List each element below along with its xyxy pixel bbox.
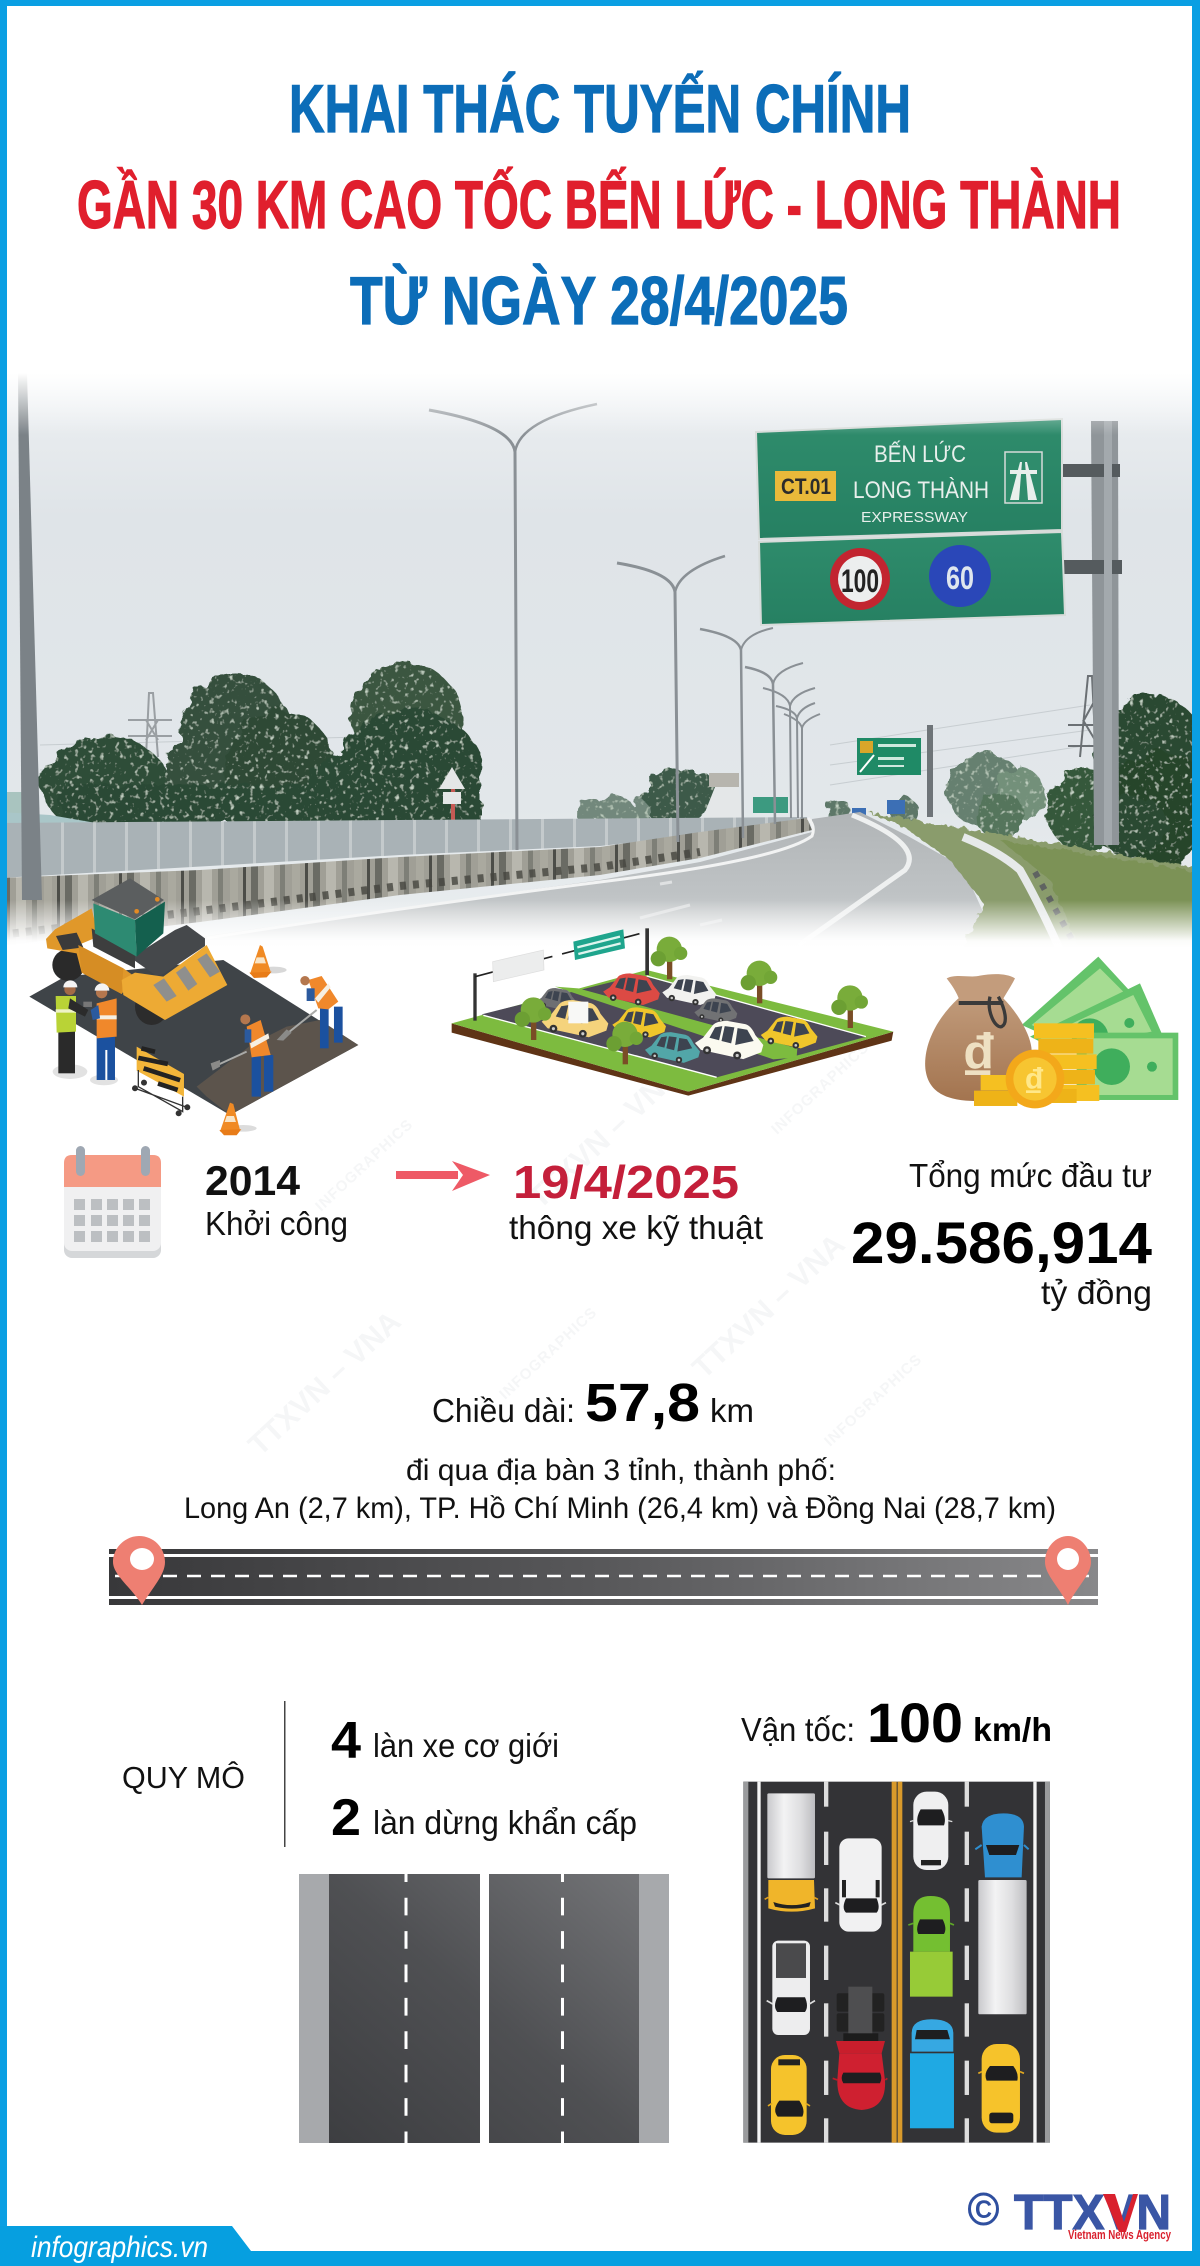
guard rail: [963, 837, 1060, 950]
lane counts: 2: [331, 1789, 361, 1847]
cone upper: [249, 945, 287, 978]
footer band: [0, 2226, 1200, 2266]
illustration: money bag, coins and notes: [925, 957, 1178, 1108]
right transmission tower: [1068, 676, 1096, 757]
verge grass: [868, 812, 1200, 950]
small green sign: [857, 725, 933, 817]
striped barrier: [132, 1047, 190, 1116]
worker with tablet: [83, 983, 118, 1085]
red truck: [833, 1987, 887, 2110]
photo: expressway with sign gantry: [0, 373, 1200, 950]
expressway sign: CT.01: [781, 474, 831, 499]
speed: Vận tốc:: [741, 1711, 855, 1748]
lane counts: [331, 1712, 637, 1847]
illustration: road with cars: [452, 928, 893, 1096]
white pickup: [767, 1941, 815, 2035]
blue truck: [910, 2019, 954, 2128]
distant gantry and small sign: [706, 773, 905, 815]
gold coins: [974, 1023, 1099, 1108]
watermarks: TTXVN – VNA: [522, 1058, 687, 1215]
length figure: km: [710, 1392, 754, 1429]
worker with shovel right: [277, 976, 343, 1048]
scale heading: QUY MÔ: [122, 1760, 245, 1795]
title: [77, 70, 1121, 339]
concrete barrier: [0, 818, 812, 946]
white car right: [910, 1792, 952, 1870]
start date: [205, 1157, 348, 1242]
money bag: [925, 974, 1032, 1101]
white box truck with yellow cab: [765, 1793, 818, 1912]
yellow car left: [768, 2055, 810, 2135]
start date: Khởi công: [205, 1205, 348, 1242]
left trees: [41, 663, 482, 833]
top-view traffic: [743, 1782, 1050, 2143]
total investment: Tổng mức đầu tư: [909, 1157, 1152, 1194]
arrow: [396, 1161, 490, 1191]
banknotes: [1022, 957, 1178, 1100]
photo bottom fade: [0, 900, 1200, 948]
cone lower: [219, 1103, 257, 1135]
total investment: [851, 1157, 1152, 1311]
opening date: 19/4/2025: [513, 1156, 739, 1208]
watermarks: TTXVN – VNA: [686, 1228, 851, 1385]
watermarks: INFOGRAPHICS: [496, 1304, 601, 1403]
triangle road sign: [439, 767, 465, 820]
fence: [0, 817, 807, 878]
length figure: Chiều dài:: [432, 1392, 575, 1429]
green truck: [908, 1896, 954, 1997]
total investment: 29.586,914: [851, 1211, 1152, 1276]
distant trees: [576, 752, 1046, 839]
route description: đi qua địa bàn 3 tỉnh, thành phố:: [406, 1454, 836, 1487]
lanes diagram: [299, 1874, 669, 2143]
long white box truck: [978, 1880, 1027, 2014]
left transmission tower: [128, 693, 172, 757]
lane counts: làn xe cơ giới: [373, 1727, 559, 1764]
speed: 100: [867, 1691, 963, 1754]
white van: [835, 1838, 886, 1932]
opening date: thông xe kỹ thuật: [509, 1209, 763, 1246]
expressway sign: BẾN LỨC: [874, 440, 966, 468]
logo: Vietnam News Agency: [1068, 2228, 1171, 2242]
scale divider: [284, 1701, 286, 1847]
big sign post: [1062, 421, 1122, 845]
lane counts: làn dừng khẩn cấp: [373, 1804, 637, 1841]
blue car right: [975, 1813, 1029, 1877]
watermarks: INFOGRAPHICS: [312, 1116, 417, 1215]
icon: left pin: [113, 1536, 165, 1605]
expressway sign: EXPRESSWAY: [861, 509, 968, 526]
road strip with pins: [109, 1536, 1098, 1605]
expressway sign: LONG THÀNH: [853, 477, 989, 504]
watermarks: [242, 1039, 926, 1462]
logo: C: [975, 2196, 992, 2224]
speed: [741, 1691, 1052, 1754]
lane counts: 4: [331, 1712, 361, 1770]
gantry: [473, 928, 649, 1021]
photo top fade: [0, 373, 1200, 435]
total investment: tỷ đồng: [1041, 1274, 1152, 1311]
right trees: [1047, 695, 1200, 868]
logo: TTXVN: [1014, 2186, 1171, 2240]
worker green vest: [53, 980, 88, 1079]
roller machine: [46, 878, 227, 1025]
expressway sign: 100: [841, 563, 879, 599]
title: TỪ NGÀY 28/4/2025: [350, 263, 848, 339]
yellow car right: [978, 2044, 1024, 2133]
worker with shovel centre: [211, 1014, 273, 1097]
route description: Long An (2,7 km), TP. Hồ Chí Minh (26,4 km) và Đồng Nai (28,7 km): [184, 1492, 1056, 1525]
expressway sign: 60: [946, 560, 974, 596]
lamp posts: [429, 404, 820, 850]
icon: right pin: [1045, 1536, 1091, 1605]
length figure: [432, 1373, 754, 1433]
length figure: 57,8: [585, 1373, 700, 1433]
building: [7, 792, 93, 823]
route description: [184, 1454, 1056, 1525]
expressway sign: [756, 419, 1065, 625]
opening date: [509, 1156, 763, 1246]
road surface: [282, 812, 982, 928]
left pole: [18, 373, 42, 900]
footer band: infographics.vn: [31, 2231, 208, 2264]
title: KHAI THÁC TUYẾN CHÍNH: [289, 70, 911, 147]
watermarks: INFOGRAPHICS: [821, 1351, 926, 1450]
money bag: đ: [963, 1023, 994, 1079]
icon: calendar: [64, 1146, 161, 1258]
watermarks: INFOGRAPHICS: [768, 1039, 873, 1138]
start date: 2014: [205, 1157, 301, 1204]
speed: km/h: [973, 1711, 1052, 1748]
illustration: road roller and workers: [29, 878, 358, 1135]
gold coins: đ: [1025, 1062, 1044, 1095]
watermarks: TTXVN – VNA: [242, 1305, 407, 1462]
